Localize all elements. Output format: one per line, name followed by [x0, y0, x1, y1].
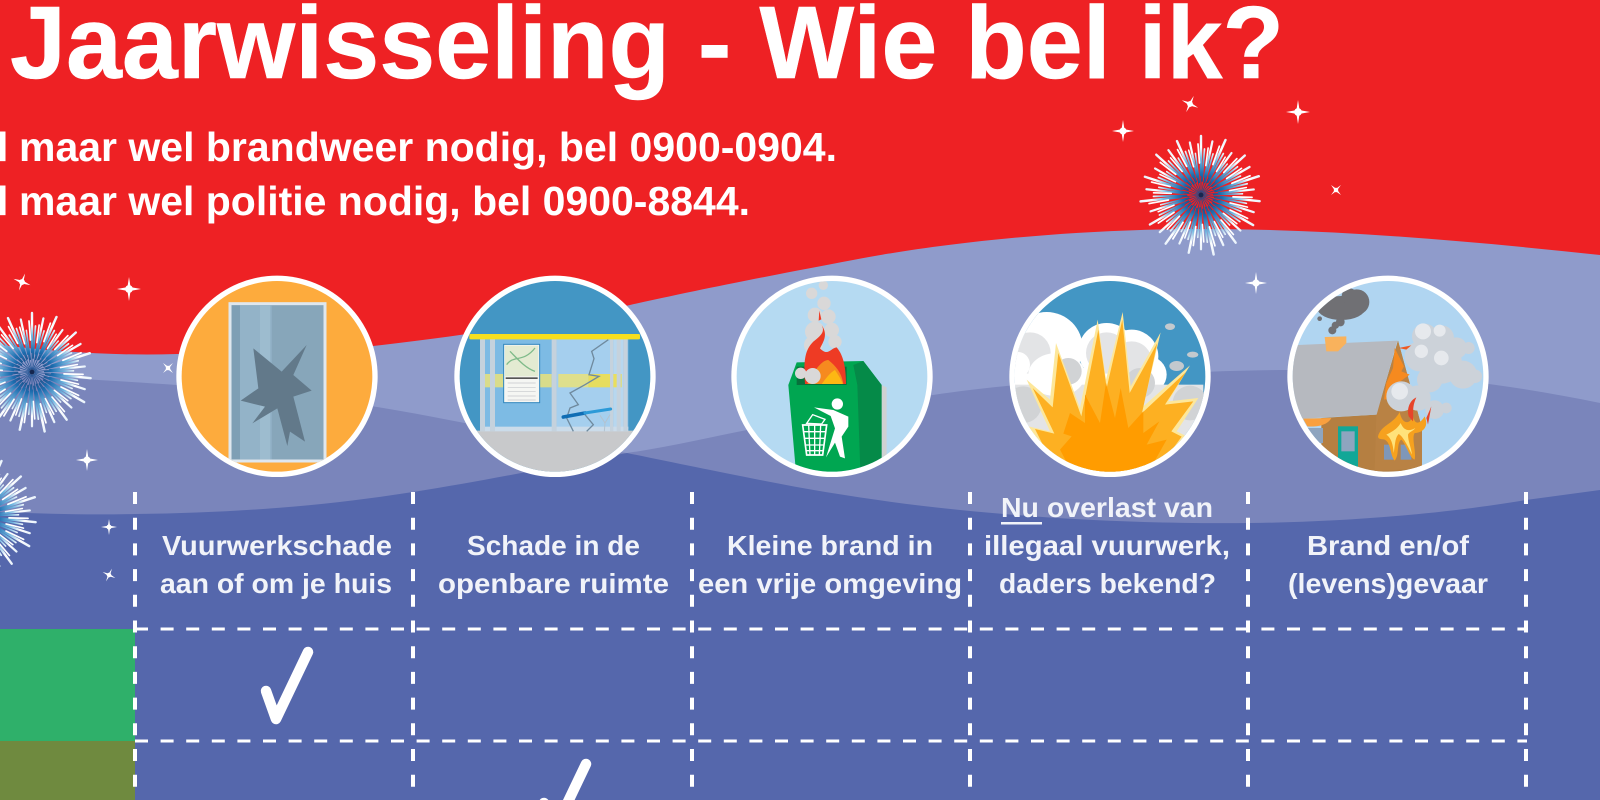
- olive row swatch: [0, 741, 135, 800]
- column header: Nu overlast: [984, 492, 1230, 599]
- firework: left bottom: [0, 457, 36, 576]
- check mark: row 1: [266, 652, 308, 719]
- column header: Nu overlast: Nu overlast van: [1001, 492, 1213, 523]
- column header: Kleine brand: Kleine brand in: [727, 530, 933, 561]
- check mark: row 2: [544, 764, 586, 800]
- column header: Nu overlast: daders bekend?: [999, 568, 1216, 599]
- icon: burning house: [1287, 276, 1489, 477]
- icon: damaged bus shelter: [454, 276, 656, 477]
- dashed table grid: [135, 492, 1527, 800]
- icon: broken window: [176, 276, 378, 477]
- wave: light periwinkle: [0, 229, 1600, 800]
- column header: Brand: (levens)gevaar: [1288, 568, 1488, 599]
- column header: Schade: [438, 530, 669, 599]
- subtitle: police number: maar wel politie nodig, bel 0900-8844.: [19, 178, 750, 224]
- column header: Vuurwerkschade: [160, 530, 392, 599]
- green row swatch: [0, 629, 135, 741]
- subtitle: fire brigade number: maar wel brandweer nodig, bel 0900-0904.: [19, 124, 837, 170]
- column header: Kleine brand: een vrije omgeving: [698, 568, 962, 599]
- column header: Vuurwerkschade: aan of om je huis: [160, 568, 392, 599]
- column header: Kleine brand: [698, 530, 962, 599]
- icon: illegal fireworks explosion: [1009, 276, 1211, 477]
- wave: dark blue: [0, 453, 1600, 800]
- wave: medium periwinkle: [0, 370, 1600, 800]
- icon: burning trash bin: [731, 276, 933, 477]
- firework: top right: [1140, 136, 1260, 255]
- firework: left middle: [0, 313, 91, 432]
- column header: Schade: Schade in de: [467, 530, 640, 561]
- column header: Nu overlast: illegaal vuurwerk,: [984, 530, 1230, 561]
- column header: Vuurwerkschade: Vuurwerkschade: [162, 530, 392, 561]
- column header: Brand: Brand en/of: [1307, 530, 1470, 561]
- column header: Brand: [1288, 530, 1488, 599]
- sparkling stars: [10, 92, 1346, 584]
- column header: Schade: openbare ruimte: [438, 568, 669, 599]
